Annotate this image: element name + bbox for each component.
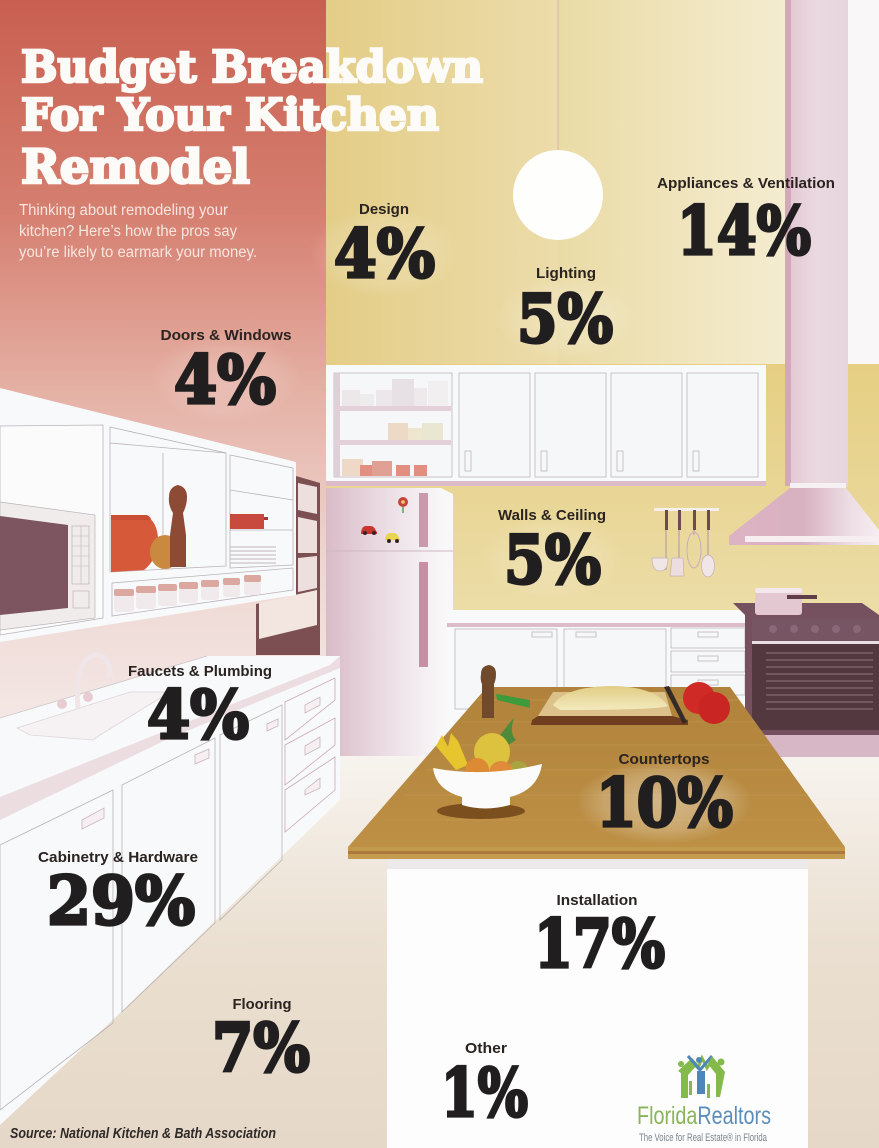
stat: walls and ceiling: Walls & Ceiling [498,507,606,524]
icon: pepper mill small [481,665,496,718]
icon: tomatoes [683,682,730,724]
intro text: you’re likely to earmark your money. [19,244,257,261]
stat: faucets and plumbing: Faucets & Plumbing [128,663,272,680]
back base cabinets [447,610,745,757]
stat: flooring: 7% [212,1009,310,1087]
microwave [0,502,95,630]
icon: ochre bowl [150,535,180,569]
stat: other: 1% [441,1054,528,1132]
title: For Your Kitchen [21,90,439,141]
pendant lamp [513,0,603,240]
stat: flooring: Flooring [232,996,292,1013]
stat: faucets and plumbing [128,663,272,754]
icon: house figures [678,1056,725,1098]
stat: cabinetry and hardware: Cabinetry & Hardware [38,849,198,866]
upper wall cabinets [326,365,766,486]
fridge [326,488,453,756]
logo: Florida Realtors [637,1056,771,1144]
range hood [729,0,879,545]
countertop [348,665,845,869]
sink [17,692,170,740]
intro text: Thinking about remodeling your [19,202,228,219]
stat: countertops: 10% [596,764,733,842]
icon: plates [230,547,276,563]
stat: doors and windows: Doors & Windows [160,327,292,344]
stat: doors and windows: 4% [174,341,276,419]
title: Budget Breakdown [21,42,483,93]
upper left cabinets with microwave [0,388,296,642]
icon: orange pot [111,515,158,572]
stat: countertops: Countertops [618,751,710,768]
icon: yellow car magnet [385,533,400,543]
logo wordmark: FloridaRealtors [637,1102,771,1130]
stat: design: Design [359,201,409,218]
stat: faucets and plumbing: 4% [147,676,249,754]
title [21,42,483,195]
stat: installation: 17% [534,905,665,983]
left red wall lower dark cabinet side [256,476,320,655]
stat: cabinetry and hardware: 29% [47,862,195,940]
background: floor [0,755,879,1148]
lower left counter and base cabinets [0,655,340,1125]
cutting board with bread [531,686,688,725]
island base [387,858,808,1148]
icon: red pot [230,514,268,529]
source: Source: National Kitchen & Bath Association [10,1126,276,1142]
icon: pepper mill [169,485,187,567]
intro text: kitchen? Here’s how the pros say [19,223,237,240]
icon: fruit bowl [433,718,542,819]
background: yellow wall upper left [326,0,558,365]
icon: saucepan [755,588,817,615]
stat: other: Other [465,1040,507,1057]
logo tagline: The Voice for Real Estate® in Florida [639,1132,768,1144]
faucet [57,655,110,709]
soft glow behind numbers [151,207,752,844]
background: lower yellow wall [326,364,879,624]
utensil rack [652,508,719,577]
stove [733,588,879,757]
background: red wall [0,0,327,760]
icon: knife [664,686,687,724]
icon: red car magnet [361,526,377,535]
intro text [19,202,257,261]
icon: spice jars [114,575,261,612]
stat: appliances and ventilation: 14% [677,192,811,270]
stat: installation: Installation [556,892,638,909]
icon: flower magnet [398,497,408,513]
background: upper right wall [785,0,879,365]
stat: appliances and ventilation: Appliances & Ventilation [657,175,835,192]
stat: lighting: 5% [517,280,613,358]
stat: lighting: Lighting [536,265,596,282]
title: Remodel [21,140,250,195]
icon: green onion [496,694,530,708]
stat: design: 4% [334,215,435,293]
stat: walls and ceiling: 5% [504,521,601,599]
background: yellow wall upper right [558,0,786,365]
